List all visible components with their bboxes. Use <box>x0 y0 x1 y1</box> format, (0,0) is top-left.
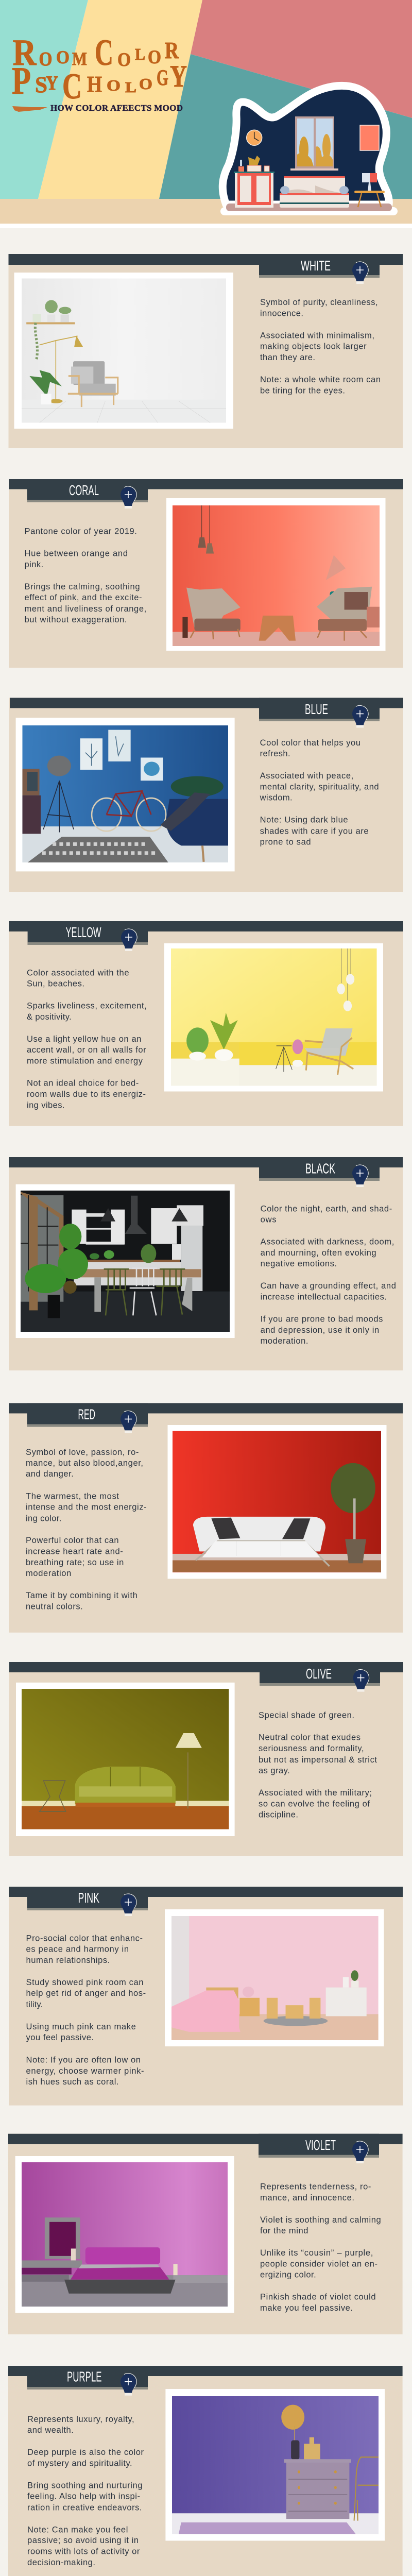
heading: BLUE <box>305 701 328 717</box>
body text: prone to sad <box>260 838 311 847</box>
body text: make you feel passive. <box>260 2303 353 2313</box>
panel: yellow <box>9 921 403 1126</box>
body text: Color associated with the <box>27 968 129 977</box>
body text: human relationships. <box>26 1956 110 1965</box>
body text: Tame it by combining it with <box>26 1591 138 1600</box>
panel: coral <box>9 479 403 668</box>
panel: pink <box>9 1887 403 2106</box>
photo: olive room <box>22 1689 229 1829</box>
body text <box>260 2182 381 2313</box>
body text: seriousness and formality, <box>259 1744 364 1753</box>
clock <box>247 130 262 145</box>
title: M <box>72 48 87 69</box>
body text: Deep purple is also the color <box>27 2448 144 2457</box>
body text <box>25 527 146 624</box>
body text: Note: a whole white room can <box>260 375 381 384</box>
wall picture <box>360 125 379 150</box>
title: O <box>148 47 161 68</box>
body text: Unlike its “cousin” – purple, <box>260 2248 373 2258</box>
sofa <box>280 176 349 208</box>
body text: but not as impersonal & strict <box>259 1755 377 1765</box>
body text: and depression, use it only in <box>261 1326 379 1335</box>
panel: purple <box>8 2366 403 2576</box>
body text: than they are. <box>260 353 315 362</box>
body text: rooms with lots of activity or <box>27 2547 140 2556</box>
photo: blue room <box>22 725 228 862</box>
icon: bulb plus <box>121 2374 136 2396</box>
hero banner <box>0 0 412 228</box>
panel: blue <box>9 698 403 892</box>
photo frame <box>166 498 385 651</box>
body text: increase intellectual capacities. <box>261 1292 387 1301</box>
body text: The warmest, the most <box>26 1492 119 1501</box>
title: C <box>62 66 82 107</box>
photo: white room <box>22 278 226 422</box>
body text: as gray. <box>259 1766 290 1775</box>
body text <box>27 2415 144 2567</box>
body text: and wealth. <box>27 2426 74 2435</box>
body text: Use a light yellow hue on an <box>27 1035 141 1044</box>
body text: Sun, beaches. <box>27 979 84 989</box>
body text: Not an ideal choice for bed- <box>27 1079 139 1088</box>
body text: Can have a grounding effect, and <box>261 1281 396 1291</box>
title: O <box>56 47 70 67</box>
photo frame <box>16 718 235 871</box>
body text: room walls due to its energiz- <box>27 1090 146 1099</box>
table lamp and side table <box>354 173 385 207</box>
tab <box>259 2134 379 2158</box>
body text: Bring soothing and nurturing <box>27 2481 142 2490</box>
tab <box>28 921 148 945</box>
body text: more stimulation and energy <box>27 1056 143 1065</box>
body text: negative emotions. <box>261 1259 337 1268</box>
panel: white <box>8 254 403 448</box>
body text: refresh. <box>260 749 290 758</box>
body text: Represents luxury, royalty, <box>27 2415 134 2424</box>
heading: RED <box>78 1406 95 1422</box>
body text: Violet is soothing and calming <box>260 2215 381 2225</box>
body text <box>26 1934 146 2087</box>
title: L <box>125 79 136 96</box>
body text: Symbol of love, passion, ro- <box>26 1448 139 1457</box>
title: H <box>87 72 102 97</box>
body text: help get rid of anger and hos- <box>26 1989 146 1998</box>
tab <box>27 2366 148 2389</box>
body text: Associated with darkness, doom, <box>261 1238 394 1247</box>
heading: BLACK <box>305 1160 335 1176</box>
body text <box>260 738 379 847</box>
body text: Special shade of green. <box>259 1711 354 1720</box>
heading: CORAL <box>69 482 99 498</box>
body text: Note: Can make you feel <box>27 2525 128 2534</box>
title: O <box>39 48 53 70</box>
body text: ish hues such as coral. <box>26 2077 118 2087</box>
photo: violet room <box>22 2162 228 2307</box>
title: O <box>139 75 152 93</box>
photo: red room <box>173 1431 381 1572</box>
cabinet with plants <box>234 156 274 208</box>
body text <box>261 1204 396 1346</box>
room illustration <box>220 86 398 215</box>
body text: Powerful color that can <box>26 1536 119 1545</box>
title: O <box>117 49 131 71</box>
photo: purple room <box>172 2396 379 2534</box>
panel: olive <box>9 1662 403 1856</box>
body text: Associated with minimalism, <box>260 331 374 340</box>
title: O <box>107 76 121 94</box>
body text: energy, choose warmer pink- <box>26 2066 144 2076</box>
tab <box>27 1403 148 1427</box>
heading: PINK <box>78 1890 99 1906</box>
body text: but without exaggeration. <box>25 615 127 624</box>
body text: feeling. Also help with inspi- <box>27 2492 140 2501</box>
title: L <box>135 45 145 63</box>
tab <box>27 479 148 502</box>
photo: pink room <box>171 1916 379 2040</box>
photo: black kitchen <box>21 1190 230 1332</box>
title: R <box>165 38 179 63</box>
photo frame <box>16 1184 235 1338</box>
body text: wisdom. <box>260 793 293 803</box>
body text: tility. <box>26 2000 43 2009</box>
icon: bulb plus <box>352 262 368 284</box>
heading: OLIVE <box>306 1666 332 1682</box>
heading: WHITE <box>301 258 331 274</box>
body text <box>259 1711 377 1820</box>
title: C <box>95 32 113 73</box>
body text: increase heart rate and- <box>26 1547 123 1556</box>
body text: es peace and harmony in <box>26 1945 129 1954</box>
title: Y <box>46 72 58 94</box>
body text: ing vibes. <box>27 1101 65 1110</box>
body text: of mystery and spirituality. <box>27 2459 132 2468</box>
tab <box>27 1887 148 1910</box>
body text: Note: If you are often low on <box>26 2055 141 2064</box>
brush stroke <box>12 106 47 112</box>
photo frame <box>164 943 383 1091</box>
body text: mental clarity, spirituality, and <box>260 782 379 791</box>
body text: you feel passive. <box>26 2033 94 2042</box>
photo frame <box>16 1683 235 1836</box>
body text: moderation. <box>261 1336 308 1346</box>
title: G <box>157 66 168 90</box>
body text: Sparks liveliness, excitement, <box>27 1002 147 1011</box>
body text <box>27 968 147 1110</box>
body text: Study showed pink room can <box>26 1978 143 1987</box>
heading: YELLOW <box>66 924 101 940</box>
title: R <box>12 32 37 73</box>
body text: ows <box>261 1215 277 1225</box>
heading: VIOLET <box>305 2137 336 2153</box>
body text: ment and liveliness of orange, <box>25 604 146 614</box>
body text: ing color. <box>26 1514 61 1523</box>
body text: passive; so avoid using it in <box>27 2536 139 2545</box>
photo frame <box>14 273 233 429</box>
icon: bulb plus <box>121 1411 136 1433</box>
panel: violet <box>8 2134 403 2334</box>
body text: neutral colors. <box>26 1602 83 1612</box>
icon: bulb plus <box>352 705 368 727</box>
photo frame <box>165 1909 384 2046</box>
heading: PURPLE <box>67 2369 102 2385</box>
body text: be tiring for the eyes. <box>260 386 345 395</box>
body text: Note: Using dark blue <box>260 816 348 825</box>
photo: coral room <box>173 505 380 646</box>
body text: discipline. <box>259 1810 298 1820</box>
body text: for the mind <box>260 2226 308 2235</box>
photo frame <box>168 1425 386 1579</box>
body text: moderation <box>26 1569 71 1578</box>
title <box>12 32 187 107</box>
body text: Neutral color that exudes <box>259 1733 360 1742</box>
body text: Pro-social color that enhanc- <box>26 1934 143 1943</box>
body text: Cool color that helps you <box>260 738 360 748</box>
body text: & positivity. <box>27 1012 72 1022</box>
title: P <box>12 60 31 103</box>
photo frame <box>15 2156 234 2313</box>
body text <box>260 298 381 395</box>
icon: bulb plus <box>121 486 136 509</box>
icon: bulb plus <box>121 1894 136 1916</box>
body text: If you are prone to bad moods <box>261 1315 383 1324</box>
body text: decision-making. <box>27 2558 95 2567</box>
title: S <box>35 72 47 97</box>
panel: red <box>9 1403 403 1633</box>
body text: accent wall, or on all walls for <box>27 1045 146 1055</box>
body text: and danger. <box>26 1469 74 1479</box>
panel: black <box>9 1157 403 1370</box>
body text: effect of pink, and the excite- <box>25 593 142 602</box>
title: Y <box>170 59 187 93</box>
body text: ration in creative endeavors. <box>27 2503 142 2512</box>
body text: intense and the most energiz- <box>26 1503 147 1512</box>
body text: innocence. <box>260 309 303 318</box>
body text: Pinkish shade of violet could <box>260 2293 376 2302</box>
icon: bulb plus <box>121 929 137 951</box>
tab <box>259 254 380 278</box>
tab <box>259 1157 380 1181</box>
icon: bulb plus <box>352 1165 368 1187</box>
body text: breathing rate; so use in <box>26 1558 124 1567</box>
icon: bulb plus <box>352 2141 368 2163</box>
body text: shades with care if you are <box>260 826 369 836</box>
body text: mance, but also blood,anger, <box>26 1459 143 1468</box>
photo: yellow room <box>171 948 377 1086</box>
window <box>290 116 338 171</box>
tab <box>260 1662 380 1686</box>
body text: Brings the calming, soothing <box>25 582 140 591</box>
body text: pink. <box>25 560 43 569</box>
body text: Hue between orange and <box>25 549 128 558</box>
body text: making objects look larger <box>260 342 367 351</box>
body text: ergizing color. <box>260 2270 316 2280</box>
icon: bulb plus <box>353 1670 369 1692</box>
body text: so can evolve the feeling of <box>259 1799 370 1808</box>
body text: Associated with the military; <box>259 1788 372 1798</box>
body text: Using much pink can make <box>26 2022 136 2031</box>
photo frame <box>165 2389 385 2541</box>
body text: Pantone color of year 2019. <box>25 527 137 536</box>
body text: mance, and innocence. <box>260 2193 354 2202</box>
body text: people consider violet an en- <box>260 2259 377 2268</box>
subtitle: HOW COLOR AFEECTS MOOD <box>50 103 183 113</box>
body text: and mourning, often evoking <box>261 1248 376 1258</box>
body text: Represents tenderness, ro- <box>260 2182 371 2192</box>
body text: Symbol of purity, cleanliness, <box>260 298 378 307</box>
body text: Associated with peace, <box>260 771 353 781</box>
body text: Color the night, earth, and shad- <box>261 1204 392 1213</box>
body text <box>26 1448 147 1612</box>
tab <box>259 698 380 721</box>
